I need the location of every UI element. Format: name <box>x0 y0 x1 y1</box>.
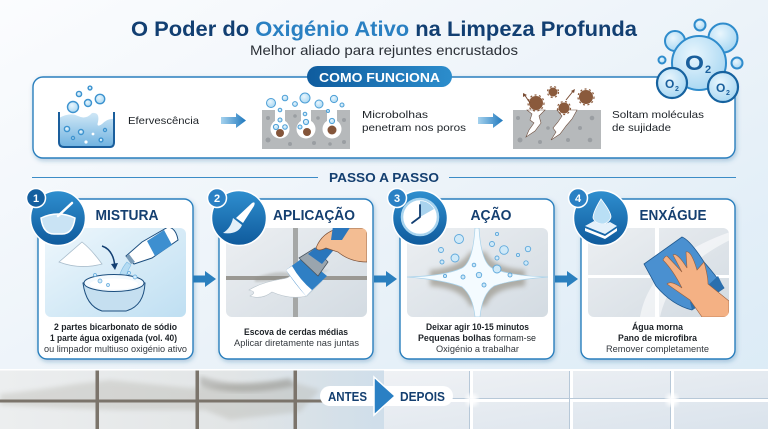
icon: step 4 drop and towel <box>568 188 628 246</box>
text: mistura instructions: ou limpador multiuso oxigénio ativo <box>44 344 187 355</box>
icon: oxygen bubbles <box>657 20 742 102</box>
label: microbolhas <box>362 109 466 134</box>
panel: before tiles <box>0 369 384 429</box>
icon: oxygen bubbles: 2 <box>675 86 679 93</box>
text: mistura instructions: 2 partes bicarbonato de sódio <box>54 322 177 333</box>
text: mistura instructions <box>44 322 187 355</box>
label pill: antes depois: DEPOIS <box>400 390 445 404</box>
before and after strip <box>0 369 768 429</box>
text: enxágue instructions <box>606 322 709 355</box>
panel: como funciona <box>33 66 735 158</box>
text: ação instructions: Oxigénio a trabalhar <box>436 344 519 355</box>
icon: dirt leaving cracks <box>513 86 601 149</box>
number badge: 3: 3 <box>394 193 400 205</box>
text: aplicação instructions: Escova de cerdas médias <box>244 327 348 338</box>
text: aplicação instructions: Aplicar diretamente nas juntas <box>234 338 359 349</box>
icon: step 3 clock <box>388 188 448 246</box>
icon: oxygen bubbles: O <box>685 52 704 75</box>
heading: aplicação: APLICAÇÃO <box>273 206 355 224</box>
label: microbolhas: Microbolhas <box>362 109 428 121</box>
label pill: antes depois <box>320 377 453 415</box>
icon: microbubbles in pores <box>262 93 350 149</box>
label: microbolhas: penetram nos poros <box>362 122 466 134</box>
arrow: step 3 to 4 <box>555 271 578 287</box>
arrow: step 2 to 3 <box>374 271 397 287</box>
label: soltam moléculas: Soltam moléculas <box>612 109 704 121</box>
icon: effervescence beaker <box>59 86 114 147</box>
text: enxágue instructions: Remover completamente <box>606 344 709 355</box>
subtitle: Melhor aliado para rejuntes encrustados <box>250 42 518 58</box>
text: ação instructions: Deixar agir 10-15 minutos <box>426 322 529 333</box>
illustration: brush on grout <box>226 226 367 317</box>
badge: como funciona: COMO FUNCIONA <box>319 70 441 85</box>
text: enxágue instructions: Água morna <box>632 322 684 333</box>
illustration: wiping with cloth <box>588 228 730 317</box>
icon: oxygen bubbles: 2 <box>705 64 711 76</box>
label pill: antes depois: ANTES <box>328 390 367 404</box>
icon: oxygen bubbles: O <box>665 77 674 91</box>
arrow <box>478 113 503 128</box>
text: ação instructions <box>418 322 536 355</box>
text: aplicação instructions <box>234 327 359 349</box>
card: step 3 ação <box>400 199 554 359</box>
heading: enxágue: ENXÁGUE <box>640 207 707 224</box>
label: efervescência: Efervescência <box>128 115 199 127</box>
card: step 1 mistura <box>38 199 193 359</box>
heading: mistura: MISTURA <box>96 208 159 224</box>
illustration: foam bubbling on grout <box>407 228 548 317</box>
icon: oxygen bubbles: O <box>716 81 725 95</box>
heading: passo a passo: PASSO A PASSO <box>329 170 439 185</box>
arrow <box>221 113 246 128</box>
illustration: pouring into bowl <box>45 227 186 317</box>
title: O Poder do Oxigénio Ativo na Limpeza Profunda <box>131 18 637 41</box>
card: step 4 enxágue <box>581 199 735 359</box>
label: soltam moléculas: de sujidade <box>612 122 671 134</box>
icon: oxygen bubbles: 2 <box>726 90 730 97</box>
text: mistura instructions: 1 parte água oxigenada (vol. 40) <box>50 333 177 344</box>
icon: step 2 circle <box>208 188 266 246</box>
label: soltam moléculas <box>612 109 704 134</box>
arrow: step 1 to 2 <box>193 271 216 287</box>
card: step 2 aplicação <box>219 199 373 359</box>
icon: step 1 circle <box>26 188 86 246</box>
text: enxágue instructions: Pano de microfibra <box>618 333 698 344</box>
number badge: 4: 4 <box>575 193 582 205</box>
number badge: 2: 2 <box>214 193 220 205</box>
badge: como funciona <box>307 66 452 87</box>
text: ação instructions: Pequenas bolhas formam-se <box>418 333 536 344</box>
heading: ação: AÇÃO <box>470 206 512 224</box>
panel: after tiles <box>384 369 768 429</box>
number badge: 1: 1 <box>33 193 39 205</box>
